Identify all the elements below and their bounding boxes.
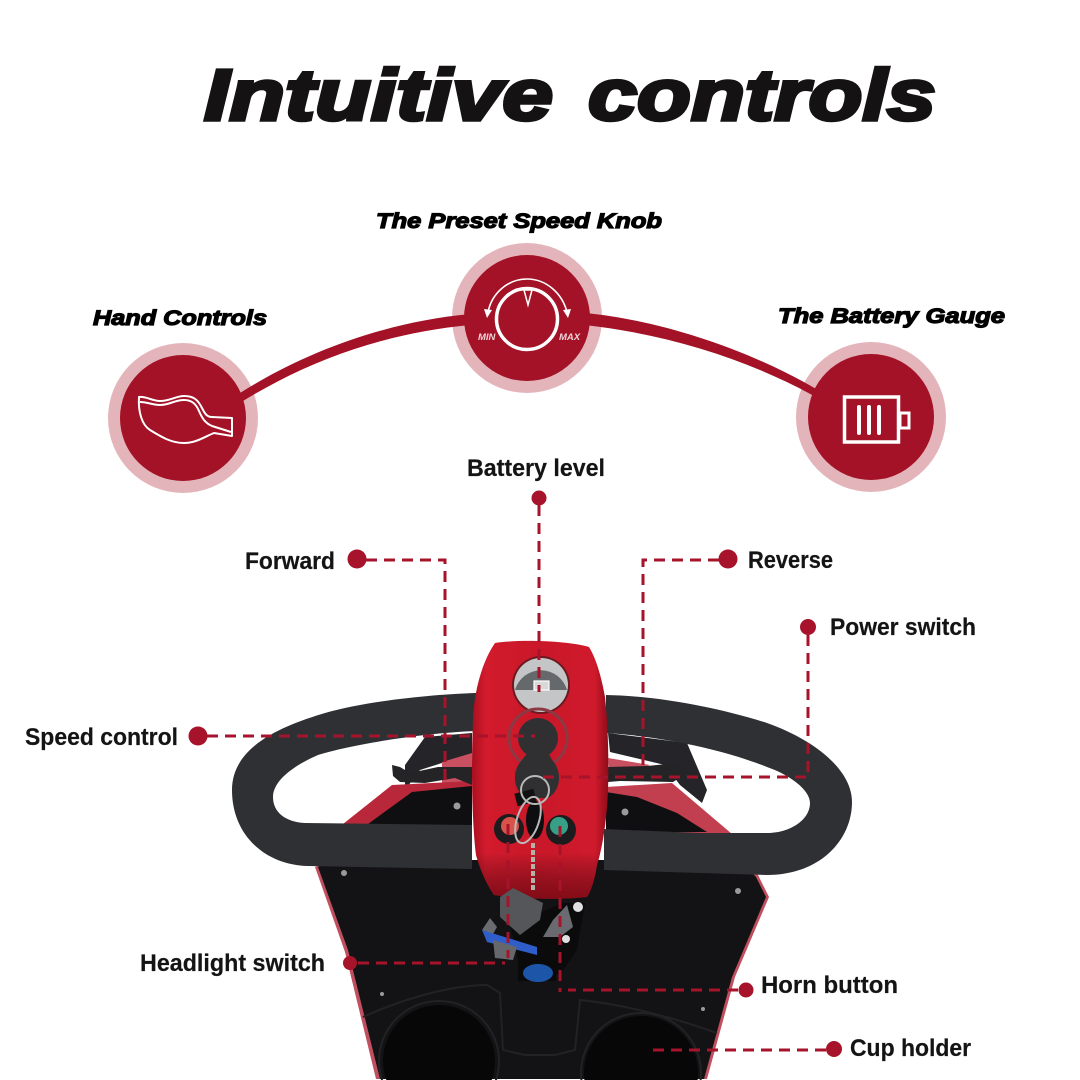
title bbox=[204, 56, 936, 136]
callout: reverse: Reverse bbox=[748, 547, 833, 574]
callout: battery level: Battery level bbox=[467, 455, 605, 482]
callout: speed control: Speed control bbox=[25, 724, 178, 751]
icon: speed dial bbox=[478, 279, 581, 350]
callout: power switch: Power switch bbox=[830, 614, 976, 641]
callout: headlight switch: Headlight switch bbox=[140, 950, 325, 977]
speed knob bbox=[509, 709, 567, 767]
feature: hand controls bbox=[93, 307, 267, 493]
right shroud behind handlebar bbox=[606, 733, 732, 834]
connector arc: hand controls to speed knob bbox=[240, 314, 470, 401]
icon: speed dial: MIN bbox=[478, 332, 497, 343]
callout: power switch bbox=[543, 614, 976, 777]
key switch bbox=[515, 752, 559, 798]
callout: forward: Forward bbox=[245, 548, 335, 575]
badge ring: battery gauge bbox=[796, 342, 946, 492]
scooter photo illustration bbox=[232, 641, 852, 1080]
badge disc: battery gauge bbox=[808, 354, 934, 480]
callout: battery level bbox=[467, 455, 605, 692]
horn button bbox=[494, 814, 524, 844]
scooter rear body panel bbox=[315, 860, 769, 1079]
badge ring: speed knob bbox=[452, 243, 602, 393]
handlebar bbox=[232, 693, 852, 875]
brake levers bbox=[392, 762, 687, 785]
callout: reverse bbox=[643, 547, 833, 770]
callout: forward bbox=[245, 548, 445, 781]
cup holder trays bbox=[363, 985, 717, 1080]
battery gauge dial bbox=[512, 656, 570, 714]
cup holders bbox=[383, 1005, 698, 1080]
icon: battery bbox=[844, 397, 909, 442]
control console bbox=[472, 641, 608, 899]
callout: cup holder: Cup holder bbox=[850, 1035, 971, 1062]
keychain charm bbox=[482, 888, 585, 982]
callout: horn button: Horn button bbox=[761, 972, 898, 999]
callout: headlight switch bbox=[140, 824, 508, 977]
badge disc: hand controls bbox=[120, 355, 246, 481]
callout: horn button bbox=[560, 826, 898, 999]
title: Intuitive bbox=[204, 56, 553, 136]
feature: preset speed knob bbox=[376, 210, 662, 393]
body screws bbox=[341, 870, 741, 1011]
heading: preset speed knob: The Preset Speed Knob bbox=[376, 210, 662, 233]
feature: battery gauge bbox=[778, 305, 1005, 492]
heading: hand controls: Hand Controls bbox=[93, 307, 267, 330]
icon: speed dial: MAX bbox=[559, 332, 581, 343]
callout: cup holder bbox=[650, 1035, 971, 1062]
title: controls bbox=[588, 56, 936, 136]
key and ring bbox=[510, 776, 549, 890]
power light button bbox=[546, 815, 576, 845]
badge ring: hand controls bbox=[108, 343, 258, 493]
left shroud behind handlebar bbox=[343, 733, 472, 830]
badge disc: speed knob bbox=[464, 255, 590, 381]
icon: hand grip bbox=[139, 396, 232, 443]
connector arc: speed knob to battery gauge bbox=[585, 313, 818, 396]
callout: speed control bbox=[25, 724, 535, 751]
heading: battery gauge: The Battery Gauge bbox=[778, 305, 1005, 328]
